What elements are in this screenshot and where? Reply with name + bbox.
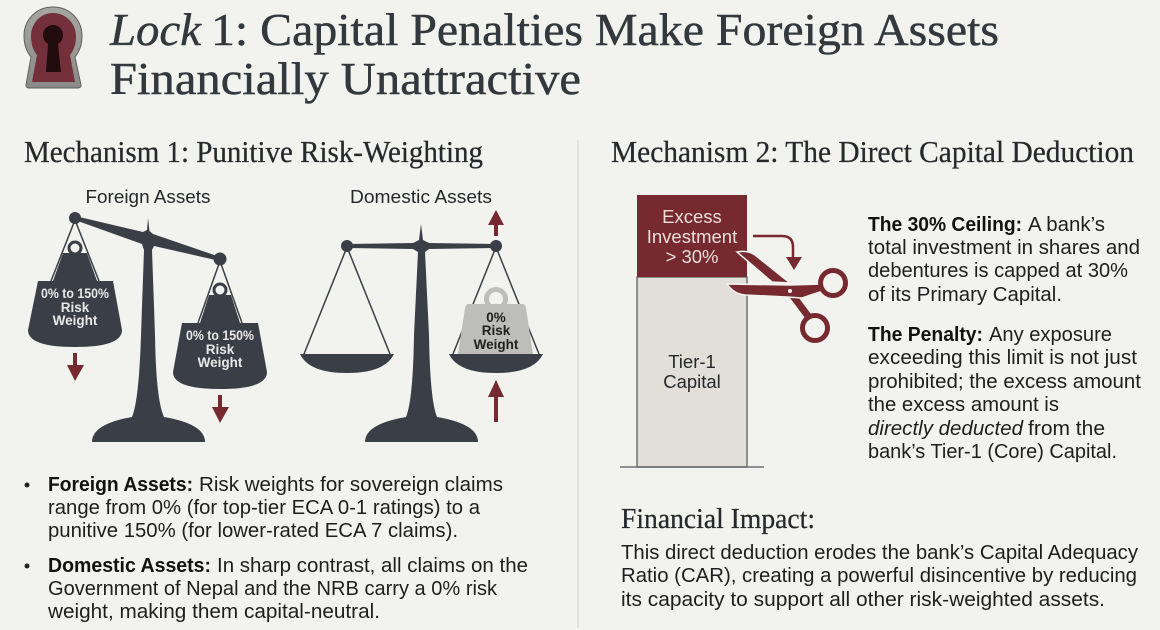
right hanging weight bbox=[173, 261, 267, 389]
text block: the 30% ceiling: total investment in shares and bbox=[868, 236, 1140, 259]
chart: domestic assets scale, balanced bbox=[300, 210, 543, 442]
arrow: up below pan bbox=[488, 380, 504, 422]
text block: the 30% ceiling: debentures is capped at 30% bbox=[868, 259, 1128, 282]
left hanging weight: 0% to 150% bbox=[41, 286, 109, 301]
right pan with 0% weight: Risk bbox=[482, 323, 511, 338]
excess investment block: Investment bbox=[647, 226, 737, 247]
text block: the penalty: Any exposure bbox=[989, 323, 1112, 346]
bullets: foreign assets: Risk weights for sovereign claims bbox=[199, 473, 503, 496]
bullets: domestic assets bbox=[24, 554, 528, 623]
heading: mechanism 2: Mechanism 2: The Direct Capital Deduction bbox=[611, 134, 1134, 169]
bullets: foreign assets: range from 0% (for top-tier ECA 0-1 ratings) to a bbox=[48, 496, 481, 519]
bullets: domestic assets: In sharp contrast, all claims on the bbox=[217, 554, 528, 577]
excess investment block: Excess bbox=[662, 206, 722, 227]
left empty pan bbox=[300, 247, 394, 373]
right pan with 0% weight: Weight bbox=[474, 337, 519, 352]
right pan with 0% weight bbox=[449, 247, 543, 373]
text block: the penalty bbox=[868, 323, 1141, 463]
text block: the penalty: from the bbox=[1028, 417, 1105, 440]
text block: the penalty: the excess amount is bbox=[868, 393, 1059, 416]
arrow: cut direction bbox=[753, 236, 802, 270]
bullets: domestic assets: Government of Nepal and the NRB carry a 0% risk bbox=[48, 577, 498, 600]
title: Financially Unattractive bbox=[110, 53, 581, 104]
text block: the 30% ceiling: A bank’s bbox=[1028, 213, 1105, 236]
icon: keyhole bbox=[24, 7, 82, 88]
icon: scissors bbox=[727, 251, 846, 340]
left hanging weight: Weight bbox=[53, 313, 98, 328]
text block: the penalty: exceeding this limit is not just bbox=[868, 346, 1137, 369]
left hanging weight: Risk bbox=[61, 300, 90, 315]
title: Lock bbox=[109, 4, 203, 55]
arrow: up above scale bbox=[488, 210, 504, 236]
text block: the 30% ceiling: of its Primary Capital. bbox=[868, 283, 1062, 306]
arrow: left weight down bbox=[67, 353, 84, 381]
text block: financial impact: This direct deduction erodes the bank’s Capital Adequacy bbox=[621, 541, 1139, 564]
left hanging weight bbox=[28, 220, 122, 347]
title bbox=[109, 4, 999, 104]
chart: foreign assets scale, tipped bbox=[28, 212, 267, 442]
tier-1 capital block: Tier-1 bbox=[668, 351, 716, 372]
tier-1 capital block bbox=[637, 277, 747, 467]
chart: capital bar with excess cut bbox=[620, 195, 846, 467]
bullets: foreign assets: Foreign Assets: bbox=[48, 473, 193, 496]
text block: financial impact: Ratio (CAR), creating a powerful disincentive by reducing bbox=[621, 564, 1137, 587]
tier-1 capital block: Capital bbox=[663, 371, 721, 392]
text block: the penalty: bank’s Tier-1 (Core) Capital. bbox=[868, 440, 1117, 463]
label: domestic assets: Domestic Assets bbox=[350, 186, 492, 207]
text block: financial impact bbox=[621, 541, 1139, 611]
bullets: domestic assets: weight, making them capital-neutral. bbox=[47, 600, 380, 623]
text block: the penalty: The Penalty: bbox=[868, 323, 983, 346]
label: foreign assets: Foreign Assets bbox=[86, 186, 210, 207]
arrow: right weight down bbox=[212, 395, 229, 423]
right pan with 0% weight: 0% bbox=[486, 310, 506, 325]
text block: the 30% ceiling bbox=[868, 213, 1140, 306]
excess investment block: > 30% bbox=[666, 246, 718, 267]
excess investment block bbox=[637, 195, 747, 277]
text block: the 30% ceiling: The 30% Ceiling: bbox=[868, 213, 1022, 236]
bullets: foreign assets bbox=[24, 473, 503, 542]
right hanging weight: 0% to 150% bbox=[186, 328, 254, 343]
title: 1: Capital Penalties Make Foreign Assets bbox=[211, 4, 999, 55]
right hanging weight: Risk bbox=[206, 342, 235, 357]
text block: the penalty: directly deducted bbox=[868, 417, 1024, 440]
text block: the penalty: prohibited; the excess amount bbox=[868, 370, 1141, 393]
right hanging weight: Weight bbox=[198, 355, 243, 370]
heading: financial impact: Financial Impact: bbox=[621, 504, 815, 535]
bullets: domestic assets: Domestic Assets: bbox=[48, 554, 211, 577]
text block: financial impact: its capacity to support all other risk-weighted assets. bbox=[621, 588, 1105, 611]
bullets: foreign assets: punitive 150% (for lower-rated ECA 7 claims). bbox=[48, 519, 458, 542]
heading: mechanism 1: Mechanism 1: Punitive Risk-Weighting bbox=[24, 134, 483, 169]
